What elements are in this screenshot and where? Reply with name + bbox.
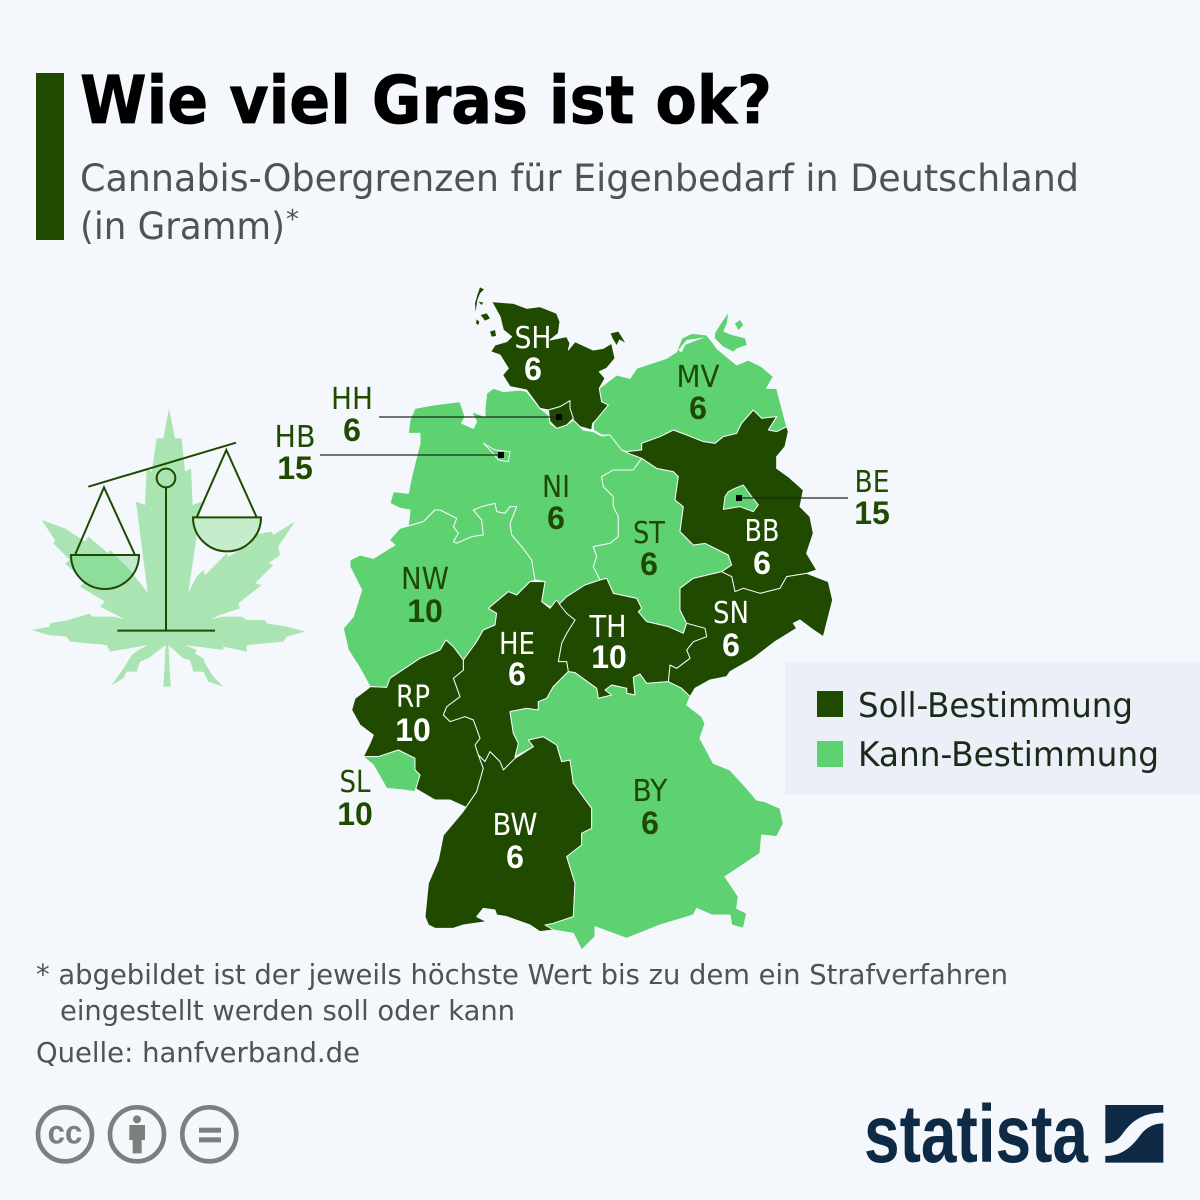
state: Schleswig-Holstein (475, 287, 625, 430)
icon: creative commons licence: cc (48, 1114, 82, 1151)
state: Bremen (483, 443, 510, 462)
footnote (36, 959, 1008, 1027)
label: HH: HH (331, 382, 373, 417)
label: MV: 6 (689, 390, 707, 426)
legend: Soll-Bestimmung: Soll-Bestimmung (858, 686, 1133, 726)
state: Baden-Württemberg (425, 737, 592, 932)
state: Mecklenburg-Vorpommern (593, 313, 787, 452)
subtitle: (in Gramm) (80, 205, 285, 248)
label: TH: TH (589, 610, 626, 645)
label: MV (676, 360, 720, 426)
legend panel (785, 662, 1200, 795)
label: SN (713, 596, 749, 663)
state: Hessen (443, 582, 575, 770)
label: BE: BE (854, 465, 890, 500)
subtitle: Cannabis-Obergrenzen für Eigenbedarf in Deutschland (80, 157, 1079, 200)
label: ST (633, 516, 666, 582)
label: HE: 6 (508, 656, 526, 692)
label: HB: HB (274, 420, 316, 455)
label: ST: 6 (640, 546, 658, 582)
label: NI (542, 470, 570, 536)
label: NW: NW (401, 562, 449, 597)
title: Wie viel Gras ist ok? (80, 62, 772, 139)
label: NW (401, 562, 449, 629)
label: BY: BY (632, 774, 668, 809)
state: Brandenburg (627, 410, 817, 593)
label: HH (331, 382, 373, 448)
subtitle (80, 157, 1079, 248)
label: SL (337, 765, 373, 832)
state: Bayern (510, 672, 783, 950)
label: RP (395, 680, 431, 748)
label: BY (632, 774, 668, 841)
state: Rheinland-Pfalz (352, 640, 483, 807)
label: HB: 15 (277, 450, 313, 486)
state: Saarland (363, 750, 420, 792)
logo: statista: statista (864, 1089, 1089, 1180)
label: SL: 10 (337, 796, 373, 832)
source: Quelle: hanfverband.de (36, 1037, 360, 1069)
label: MV: MV (676, 360, 720, 395)
cannabis leaf (32, 408, 305, 687)
label: BB: 6 (753, 545, 771, 581)
state: Niedersachsen (390, 388, 642, 607)
label: BW (492, 808, 538, 875)
label: BW: BW (492, 808, 538, 843)
footnote: eingestellt werden soll oder kann (60, 995, 515, 1027)
map of Germany (343, 287, 833, 950)
leader lines and city markers (320, 414, 848, 501)
label: BW: 6 (506, 839, 524, 875)
label: BY: 6 (641, 805, 659, 841)
icon: cannabis leaf with scales (32, 408, 305, 687)
label: RP: RP (396, 680, 430, 715)
label: SN: 6 (722, 627, 740, 663)
label: BE: 15 (854, 495, 890, 531)
state: Sachsen (668, 572, 833, 697)
label: BB: BB (744, 514, 780, 549)
label: BB (744, 514, 780, 581)
inlet on the Baltic coast (678, 337, 705, 353)
label: HE (499, 627, 535, 692)
state: Berlin (723, 485, 758, 512)
label: NI: 6 (547, 500, 565, 536)
state: Thüringen (558, 578, 707, 698)
label: SH: 6 (524, 351, 542, 387)
state: Hamburg (548, 401, 573, 428)
subtitle: * (286, 205, 299, 235)
label: SN: SN (713, 596, 749, 631)
label: TH: 10 (591, 639, 627, 675)
label: BE (854, 465, 890, 531)
legend: Kann-Bestimmung: Kann-Bestimmung (858, 735, 1159, 775)
scales (71, 443, 261, 631)
label: HB (274, 420, 316, 486)
label: RP: 10 (395, 712, 431, 748)
label: SH: SH (514, 321, 552, 356)
label: SH (514, 321, 552, 387)
label: NI: NI (542, 470, 570, 505)
label: NW: 10 (407, 593, 443, 629)
label: SL: SL (340, 765, 371, 800)
icon: creative commons licence (38, 1107, 236, 1161)
label: HE: HE (499, 627, 535, 662)
label: TH (589, 610, 627, 675)
label: ST: ST (633, 516, 666, 551)
state: Sachsen-Anhalt (593, 458, 732, 633)
label: HH: 6 (343, 412, 361, 448)
title accent bar (36, 73, 64, 240)
footnote: * abgebildet ist der jeweils höchste Wert bis zu dem ein Strafverfahren (36, 959, 1008, 991)
state: Nordrhein-Westfalen (343, 503, 535, 687)
